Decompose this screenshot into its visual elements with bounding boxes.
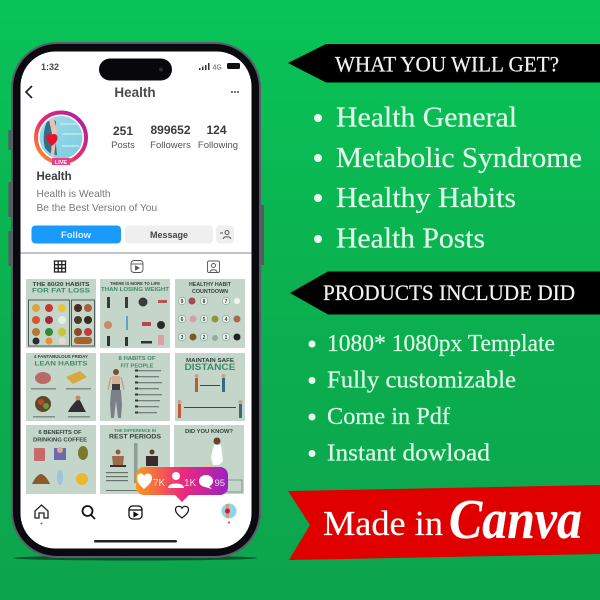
list: products include bbox=[308, 331, 555, 466]
action buttons: Message bbox=[150, 230, 188, 240]
banner: products include bbox=[290, 272, 600, 314]
tile: rest periods: THE DIFFERENCE IN bbox=[114, 428, 156, 433]
action buttons bbox=[32, 226, 234, 244]
likes badge bbox=[136, 467, 228, 502]
status bar: 1:32 bbox=[41, 62, 59, 72]
profile header bbox=[26, 85, 239, 100]
tile: countdown: 1 bbox=[225, 335, 228, 341]
tab icons bbox=[54, 260, 220, 272]
likes badge: 7K bbox=[153, 478, 166, 489]
list: products include: 1080* 1080px Template bbox=[327, 331, 555, 357]
profile stats bbox=[111, 123, 238, 151]
profile stats: Posts bbox=[111, 140, 135, 151]
tile: rest periods bbox=[100, 425, 170, 494]
bio: Be the Best Version of You bbox=[36, 203, 157, 214]
tile: safe distance: MAINTAIN SAFE bbox=[186, 358, 234, 364]
tile: countdown: 4 bbox=[225, 317, 228, 323]
list: products include: Come in Pdf bbox=[327, 404, 450, 430]
tile: countdown: 8 bbox=[203, 299, 206, 305]
tile: coffee bbox=[26, 425, 96, 494]
tile: fit people bbox=[100, 353, 170, 421]
likes badge: 95 bbox=[214, 478, 225, 489]
tile: countdown: 9 bbox=[181, 299, 184, 305]
list: what you will get: Health Posts bbox=[336, 224, 485, 254]
tile: countdown: COUNTDOWN bbox=[192, 289, 228, 295]
likes badge: 1K bbox=[184, 478, 197, 489]
tile: did you know: DID YOU KNOW? bbox=[185, 429, 234, 435]
tile: lean habits: 4 FANTABULOUS FRIDAY bbox=[34, 354, 88, 359]
status bar bbox=[41, 58, 240, 80]
banner: products include: PRODUCTS INCLUDE DID bbox=[323, 280, 575, 305]
status bar: 4G bbox=[212, 64, 222, 72]
banner: what you will get: WHAT YOU WILL GET? bbox=[335, 52, 559, 76]
tile: lean habits: LEAN HABITS bbox=[34, 360, 88, 368]
list: products include: Instant dowload bbox=[327, 440, 490, 466]
bio bbox=[36, 171, 157, 214]
tile: more to life bbox=[100, 279, 170, 348]
profile stats: 124 bbox=[206, 123, 227, 137]
tile: more to life: THAN LOSING WEIGHT bbox=[101, 287, 170, 293]
tile: did you know bbox=[174, 425, 244, 494]
tile: coffee: DRINKING COFFEE bbox=[33, 438, 87, 444]
tile: countdown bbox=[175, 279, 245, 348]
action buttons: Follow bbox=[61, 230, 92, 241]
bio: Health is Wealth bbox=[36, 189, 110, 200]
list: what you will get bbox=[314, 102, 582, 254]
profile header: Health bbox=[114, 85, 156, 100]
banner: what you will get bbox=[288, 44, 600, 82]
list: what you will get: Health General bbox=[336, 102, 517, 134]
profile stats: 899652 bbox=[150, 123, 191, 137]
tile: countdown: HEALTHY HABIT bbox=[189, 282, 231, 288]
phone bbox=[8, 42, 264, 560]
avatar bbox=[36, 112, 86, 166]
tile: fit people: FIT PEOPLE bbox=[120, 364, 154, 370]
tile: fit people: 8 HABITS OF bbox=[118, 356, 156, 362]
tile: safe distance bbox=[175, 353, 245, 421]
tile: more to life: THERE IS MORE TO LIFE bbox=[110, 281, 161, 287]
tile: countdown: 6 bbox=[181, 317, 184, 323]
avatar: LIVE bbox=[55, 160, 67, 166]
profile stats: Following bbox=[198, 140, 238, 151]
tile: lean habits bbox=[26, 353, 96, 421]
tile: safe distance: DISTANCE bbox=[184, 362, 236, 372]
list: products include: Fully customizable bbox=[327, 368, 516, 394]
tile: countdown: 3 bbox=[181, 335, 184, 341]
tile: countdown: 5 bbox=[203, 317, 206, 323]
tile: coffee: 6 BENEFITS OF bbox=[38, 430, 82, 436]
list: what you will get: Healthy Habits bbox=[336, 183, 516, 214]
tile: countdown: 7 bbox=[225, 299, 228, 305]
ribbon: made in canva: Made in bbox=[323, 504, 443, 543]
profile stats: 251 bbox=[113, 124, 133, 138]
home indicator bbox=[94, 540, 177, 542]
tile: rest periods: REST PERIODS bbox=[109, 434, 162, 440]
tile: 80/20 habits: FOR FAT LOSS bbox=[32, 288, 91, 294]
tile: countdown: 2 bbox=[203, 335, 206, 341]
tile: 80/20 habits: THE 80/20 HABITS bbox=[32, 282, 90, 288]
bottom navigation bbox=[35, 504, 236, 524]
tile: 80/20 habits bbox=[26, 279, 96, 348]
list: what you will get: Metabolic Syndrome bbox=[336, 143, 582, 174]
bio: Health bbox=[36, 171, 72, 183]
ribbon: made in canva: Canva bbox=[449, 489, 582, 551]
profile stats: Followers bbox=[150, 140, 191, 151]
ribbon: made in canva bbox=[288, 485, 600, 560]
